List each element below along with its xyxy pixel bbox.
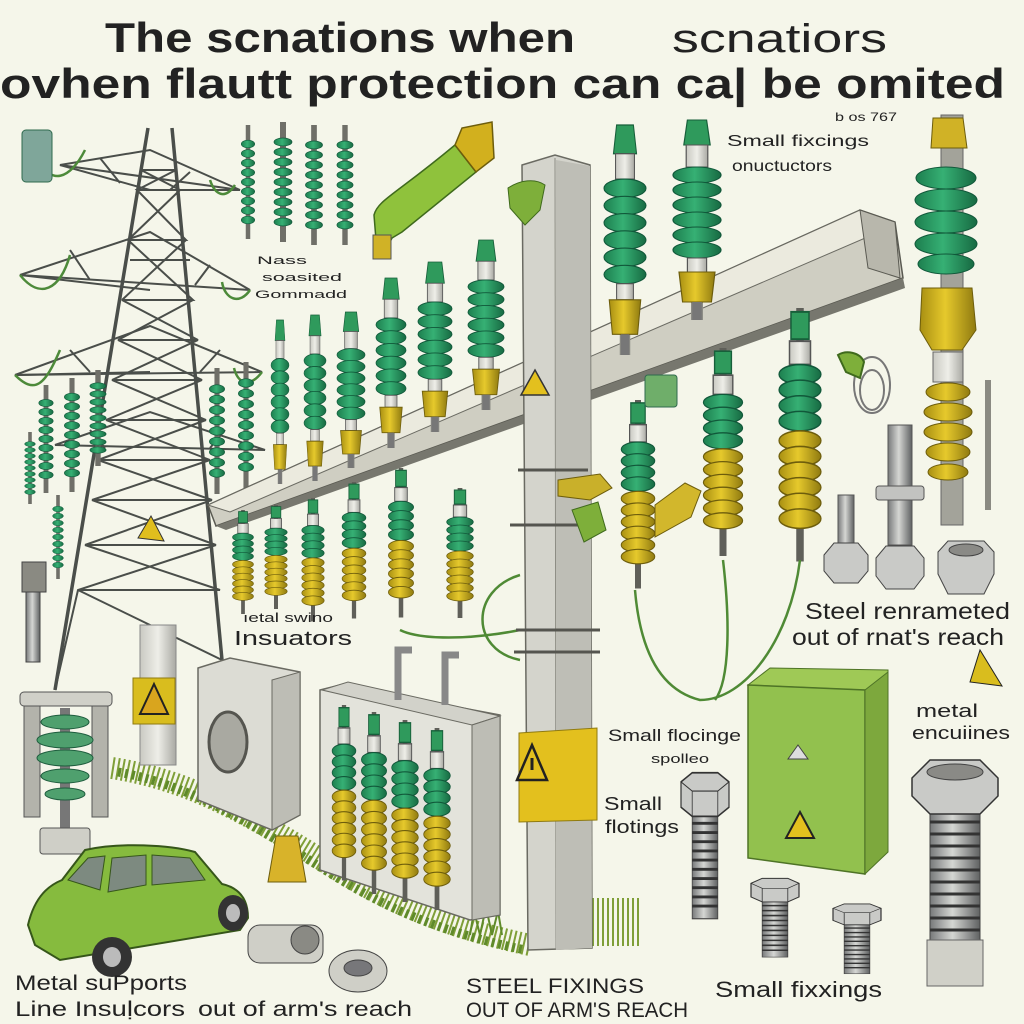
title: scnatiors (672, 17, 887, 61)
text: small flocings spolloe: Small flocinge (608, 726, 741, 745)
lattice transmission tower (15, 128, 265, 690)
green cables (400, 560, 800, 700)
text: small flocings spolloe (608, 726, 741, 766)
substation insulator bank (320, 650, 500, 920)
tower base pedestal with warning sign (133, 516, 176, 765)
text: small flocings spolloe: spolleo (651, 751, 709, 766)
small yellow cone (268, 836, 306, 882)
small warning cone right (970, 650, 1002, 686)
large bolt right (912, 760, 998, 986)
text: small flotings (604, 794, 679, 837)
text: metal enculines: encuiines (912, 723, 1010, 743)
text: metal insulators label: Insuators (234, 628, 352, 650)
right column bolts (824, 380, 994, 594)
text: steel renrameted: out of rnat's reach (792, 624, 1004, 650)
left clamp and bolt detail (22, 130, 52, 662)
steel washers (248, 925, 387, 992)
green electrical enclosure (748, 668, 888, 874)
text: metal insulators label: ıetal swino (243, 610, 333, 625)
large right insulator (915, 115, 977, 525)
text: small fixings conductors: onuctuctors (732, 158, 832, 175)
text: small fixxings: Small fixxings (715, 977, 882, 1002)
text: steel fixings: OUT OF ARM'S REACH (466, 999, 688, 1022)
framed insulator left (20, 692, 112, 854)
text: metal enculines: metal (916, 701, 978, 721)
text: small fixings conductors: Small fixcings (727, 133, 869, 150)
text: metal supports (15, 972, 412, 1021)
grey cabinet with round door (198, 658, 300, 830)
concrete pole (508, 155, 600, 950)
ground: grass strip (112, 768, 640, 950)
text: small flotings: Small (604, 794, 662, 814)
title (0, 14, 1005, 108)
title: ovhen flautt protection can ca| be omited (0, 60, 1005, 108)
wire coil (838, 352, 890, 413)
text: steel renrameted (792, 598, 1010, 650)
crossarm beam (208, 210, 905, 530)
text: small fixings conductors: b os 767 (835, 110, 897, 124)
green bracket top centre (373, 122, 494, 259)
text: metal supports: Line Insuḷcors (15, 998, 185, 1021)
text: metal enculines (912, 701, 1010, 743)
small warning sign on crossarm (521, 370, 677, 407)
insulators above the crossarm (271, 120, 721, 484)
left small insulators row (25, 122, 353, 579)
text: steel fixings (466, 975, 688, 1022)
title: The scnations when (105, 14, 575, 61)
pole clamps (558, 474, 701, 542)
mid bolts (681, 773, 881, 974)
small text: label near tower (255, 255, 347, 301)
green car (28, 845, 248, 977)
small text: label near tower: soasited (262, 272, 342, 284)
insulators hanging below the crossarm (232, 308, 821, 622)
text: steel fixings: STEEL FIXINGS (466, 975, 644, 998)
small text: label near tower: Nass (257, 255, 308, 267)
pole warning band (517, 728, 597, 822)
text: small fixings conductors (727, 110, 897, 175)
small text: label near tower: Gommadd (255, 289, 347, 301)
text: metal insulators label (234, 610, 352, 650)
text: metal supports: Metal suPports (15, 972, 187, 995)
text: metal supports: out of arm's reach (198, 998, 412, 1021)
text: steel renrameted: Steel renrameted (805, 598, 1010, 624)
text: small flotings: flotings (605, 817, 679, 837)
